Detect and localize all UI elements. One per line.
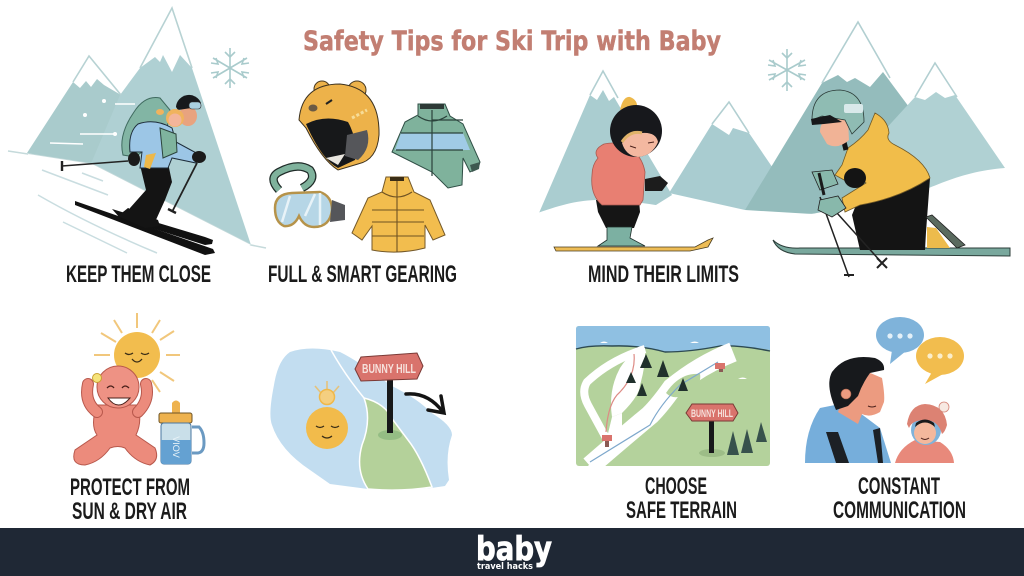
icon: baby sun	[315, 381, 339, 404]
icon: snowflake	[211, 48, 249, 88]
icon: yellow speech bubble	[916, 337, 964, 384]
illustration: trail map	[576, 326, 770, 466]
icon: teal puffer jacket	[392, 104, 480, 188]
label: CONSTANT	[858, 473, 940, 500]
divider: white trail	[331, 350, 364, 398]
illustration: mountains and snow hill	[532, 22, 1024, 290]
footer bar	[0, 528, 1024, 576]
illustration: child on skis	[554, 97, 713, 251]
illustration: blue map area	[270, 348, 452, 490]
label line two: SUN & DRY AIR	[72, 498, 187, 525]
panel: bunny hill map	[270, 348, 452, 490]
label: MIND THEIR LIMITS	[588, 261, 739, 288]
icon: snowflake	[768, 49, 806, 91]
icon: sippy cup	[159, 400, 204, 464]
logo: baby travel hacks: travel hacks	[477, 562, 533, 572]
panel: full and smart gearing	[268, 81, 480, 288]
icon: blue speech bubble	[876, 317, 924, 364]
illustration: trail map: BUNNY HILL	[691, 408, 733, 420]
icon: baby face	[306, 407, 348, 449]
label: CHOOSE	[645, 473, 707, 500]
illustration: mountains	[8, 8, 266, 253]
arrow	[406, 394, 444, 413]
illustration: father	[805, 357, 891, 463]
illustration: smiling baby	[74, 366, 157, 465]
illustration: adult kneeling on skis	[773, 90, 1010, 277]
icon: yellow puffer jacket	[352, 177, 445, 252]
panel: choose safe terrain	[576, 326, 770, 524]
title: Safety Tips for Ski Trip with Baby	[303, 26, 721, 57]
panel: constant communication	[805, 317, 966, 524]
icon: sun	[94, 313, 180, 392]
logo: baby travel hacks: baby	[476, 529, 552, 568]
label line two: SAFE TERRAIN	[626, 497, 737, 524]
icon: signpost	[355, 353, 423, 440]
illustration: skier carrying baby	[62, 95, 215, 255]
panel: keep them close	[8, 8, 266, 288]
label: PROTECT FROM	[70, 474, 190, 501]
illustration: green slope	[360, 398, 432, 490]
icon: ski goggles	[274, 166, 345, 227]
illustration: child with hat	[895, 402, 954, 463]
panel: protect from sun and dry air	[70, 313, 204, 525]
label: KEEP THEM CLOSE	[66, 261, 211, 288]
icon: signpost: BUNNY HILL	[362, 361, 416, 376]
label: FULL & SMART GEARING	[268, 261, 457, 288]
icon: bear helmet	[299, 81, 379, 170]
panel: mind their limits	[532, 22, 1024, 290]
icon: sippy cup: VIOV	[171, 436, 181, 458]
